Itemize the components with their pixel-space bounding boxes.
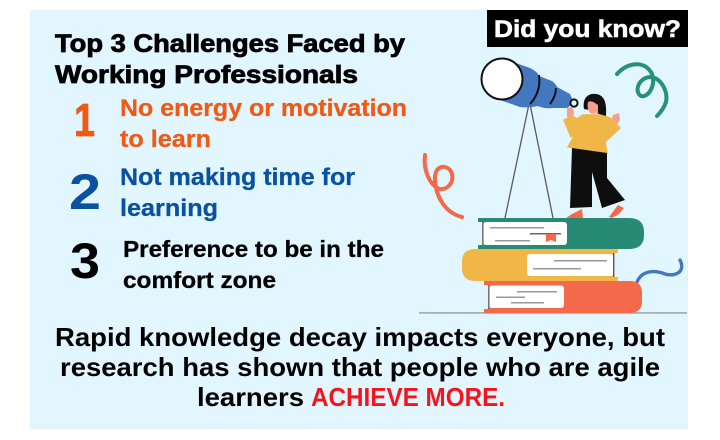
icon: yellow book — [462, 249, 618, 281]
challenge 2: learning — [120, 195, 218, 222]
icon: woman — [564, 94, 625, 218]
illustration: telescope, woman and books — [419, 58, 687, 314]
icon: telescope — [482, 58, 578, 108]
icon: green squiggle — [617, 64, 666, 116]
icon: orange book — [484, 281, 642, 313]
icon: ground line — [419, 312, 687, 314]
challenge 2: Not making time for — [120, 164, 355, 191]
challenge 2 — [69, 164, 362, 222]
challenge 1 — [74, 94, 414, 153]
badge: Did you know?: Did you know? — [494, 16, 681, 43]
challenge 2: 2 — [69, 164, 101, 220]
challenge 1: No energy or motivation — [120, 95, 407, 122]
challenge 3: 3 — [70, 233, 100, 289]
title: Top 3 Challenges Faced by — [55, 30, 405, 58]
title: Working Professionals — [55, 61, 358, 89]
challenge 1: to learn — [120, 126, 211, 153]
icon: green book — [478, 218, 644, 249]
challenge 1: 1 — [74, 94, 95, 146]
conclusion text: learners — [197, 382, 304, 412]
badge: Did you know? — [487, 10, 688, 47]
challenge 3: Preference to be in the — [123, 236, 384, 262]
icon: orange squiggle — [425, 155, 462, 217]
challenge 3: comfort zone — [123, 267, 276, 293]
conclusion text: ACHIEVE MORE. — [311, 382, 505, 412]
challenge 3 — [70, 233, 390, 293]
conclusion text: research has shown that people who are agile — [60, 352, 660, 382]
icon: tripod — [505, 104, 553, 218]
icon: blue squiggle — [637, 260, 682, 282]
conclusion text: Rapid knowledge decay impacts everyone, but — [55, 322, 665, 352]
